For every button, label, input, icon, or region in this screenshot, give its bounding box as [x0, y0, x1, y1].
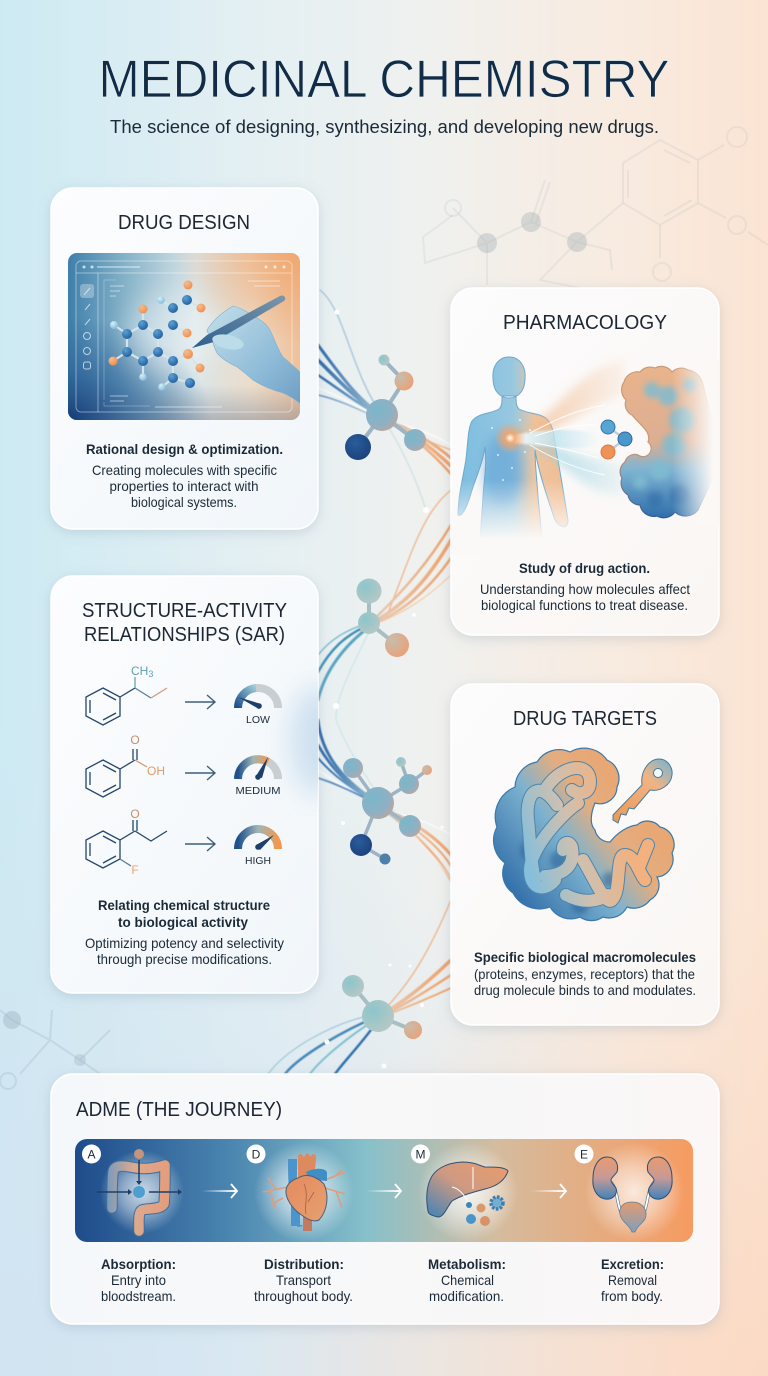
body text: drug design: [86, 441, 283, 510]
skeletal molecule: [108, 280, 206, 391]
protein: [620, 358, 720, 526]
body text: drug targets: Specific biological macromolecules: [474, 949, 696, 965]
molecule node 4: [342, 975, 422, 1039]
drug stream plumes: [522, 360, 624, 432]
drug molecule: [601, 420, 632, 459]
human figure: [458, 356, 568, 536]
caption: excretion: [601, 1256, 664, 1304]
body text: drug design: Creating molecules with specific: [92, 462, 277, 478]
panel: pharmacology: [450, 288, 720, 635]
step badges: E: [580, 1148, 588, 1162]
body text: SAR: Optimizing potency and selectivity: [85, 935, 284, 951]
stylus: [192, 295, 285, 348]
caption: distribution: [254, 1256, 353, 1304]
body text: SAR: [85, 897, 284, 967]
arrow: [366, 1184, 401, 1198]
caption: distribution: Transport: [276, 1272, 331, 1288]
row: low activity: 3: [148, 669, 153, 679]
background: faint molecule top right: [423, 127, 768, 290]
body text: pharmacology: biological functions to treat disease.: [481, 597, 688, 613]
background: faint molecule lower left: [0, 1010, 110, 1089]
heading: pharmacology: PHARMACOLOGY: [503, 312, 667, 334]
row: low activity: LOW: [246, 714, 270, 726]
step badges: [82, 1144, 594, 1164]
caption: absorption: [101, 1256, 176, 1304]
step badges: A: [87, 1148, 96, 1162]
caption: excretion: Removal: [608, 1272, 657, 1288]
row: low activity: [86, 664, 278, 726]
icon: key: [613, 759, 672, 823]
row: low activity: CH: [131, 664, 148, 678]
panel: ADME: [51, 1074, 719, 1324]
heading: SAR: RELATIONSHIPS (SAR): [84, 624, 285, 646]
row: high activity: [86, 807, 278, 877]
body text: SAR: through precise modifications.: [97, 951, 272, 967]
hand: [207, 306, 302, 405]
subtitle: The science of designing, synthesizing, and developing new drugs.: [110, 116, 659, 137]
heading: SAR: [82, 600, 287, 646]
arrow: [202, 1184, 237, 1198]
caption: absorption: Absorption:: [101, 1256, 176, 1272]
heading: SAR: STRUCTURE-ACTIVITY: [82, 600, 287, 622]
glow: [495, 423, 526, 453]
row: high activity: F: [131, 863, 139, 877]
caption: absorption: Entry into: [111, 1272, 166, 1288]
body text: drug targets: (proteins, enzymes, receptors) that the: [474, 966, 695, 982]
illustration: protein with key: [494, 748, 674, 921]
caption: metabolism: Metabolism:: [428, 1256, 506, 1272]
gradient band: [75, 1139, 693, 1242]
row: high activity: HIGH: [245, 855, 271, 867]
molecule node 2: [356, 578, 409, 657]
molecule node 1: [345, 354, 426, 460]
caption: distribution: throughout body.: [254, 1288, 353, 1304]
arrow: [531, 1184, 566, 1198]
caption: metabolism: Chemical: [441, 1272, 494, 1288]
body text: drug design: biological systems.: [131, 494, 237, 510]
heading: ADME: ADME (THE JOURNEY): [76, 1099, 282, 1121]
icon: heart: [263, 1153, 345, 1231]
heading: drug targets: DRUG TARGETS: [513, 708, 657, 730]
heading: drug design: DRUG DESIGN: [118, 212, 250, 234]
body text: SAR: Relating chemical structure: [98, 897, 270, 913]
body text: drug design: properties to interact with: [110, 478, 258, 494]
caption: distribution: Distribution:: [264, 1256, 344, 1272]
body text: drug targets: [474, 949, 696, 998]
caption: excretion: Excretion:: [601, 1256, 664, 1272]
caption: absorption: bloodstream.: [101, 1288, 176, 1304]
row: medium activity: OH: [147, 764, 165, 778]
step badges: D: [252, 1148, 261, 1162]
body text: pharmacology: Study of drug action.: [519, 560, 650, 576]
row: medium activity: O: [130, 733, 140, 747]
molecule node 3: [343, 757, 432, 864]
body text: pharmacology: Understanding how molecules affect: [480, 581, 690, 597]
caption: metabolism: modification.: [429, 1288, 504, 1304]
icon: liver: [427, 1162, 508, 1226]
body text: drug design: Rational design & optimization.: [86, 441, 283, 457]
body text: drug targets: drug molecule binds to and modulates.: [474, 982, 696, 998]
illustration: body, molecule and protein: [458, 356, 719, 536]
connecting ribbons: [268, 290, 451, 1074]
body text: pharmacology: [480, 560, 690, 613]
row: medium activity: MEDIUM: [236, 785, 280, 797]
step badges: M: [416, 1148, 426, 1162]
row: medium activity: [86, 733, 280, 797]
illustration: molecule on a tablet drawn with a stylus: [68, 253, 302, 420]
icon: intestines: [97, 1149, 182, 1231]
row: high activity: O: [130, 807, 140, 821]
icon: kidneys: [593, 1157, 672, 1232]
title: MEDICINAL CHEMISTRY: [98, 50, 670, 109]
panel: structure-activity relationships: [51, 576, 346, 993]
caption: excretion: from body.: [601, 1288, 663, 1304]
panel: drug targets: [451, 684, 719, 1025]
body text: SAR: to biological activity: [118, 914, 248, 930]
caption: metabolism: [428, 1256, 506, 1304]
panel: drug design: [51, 188, 318, 529]
